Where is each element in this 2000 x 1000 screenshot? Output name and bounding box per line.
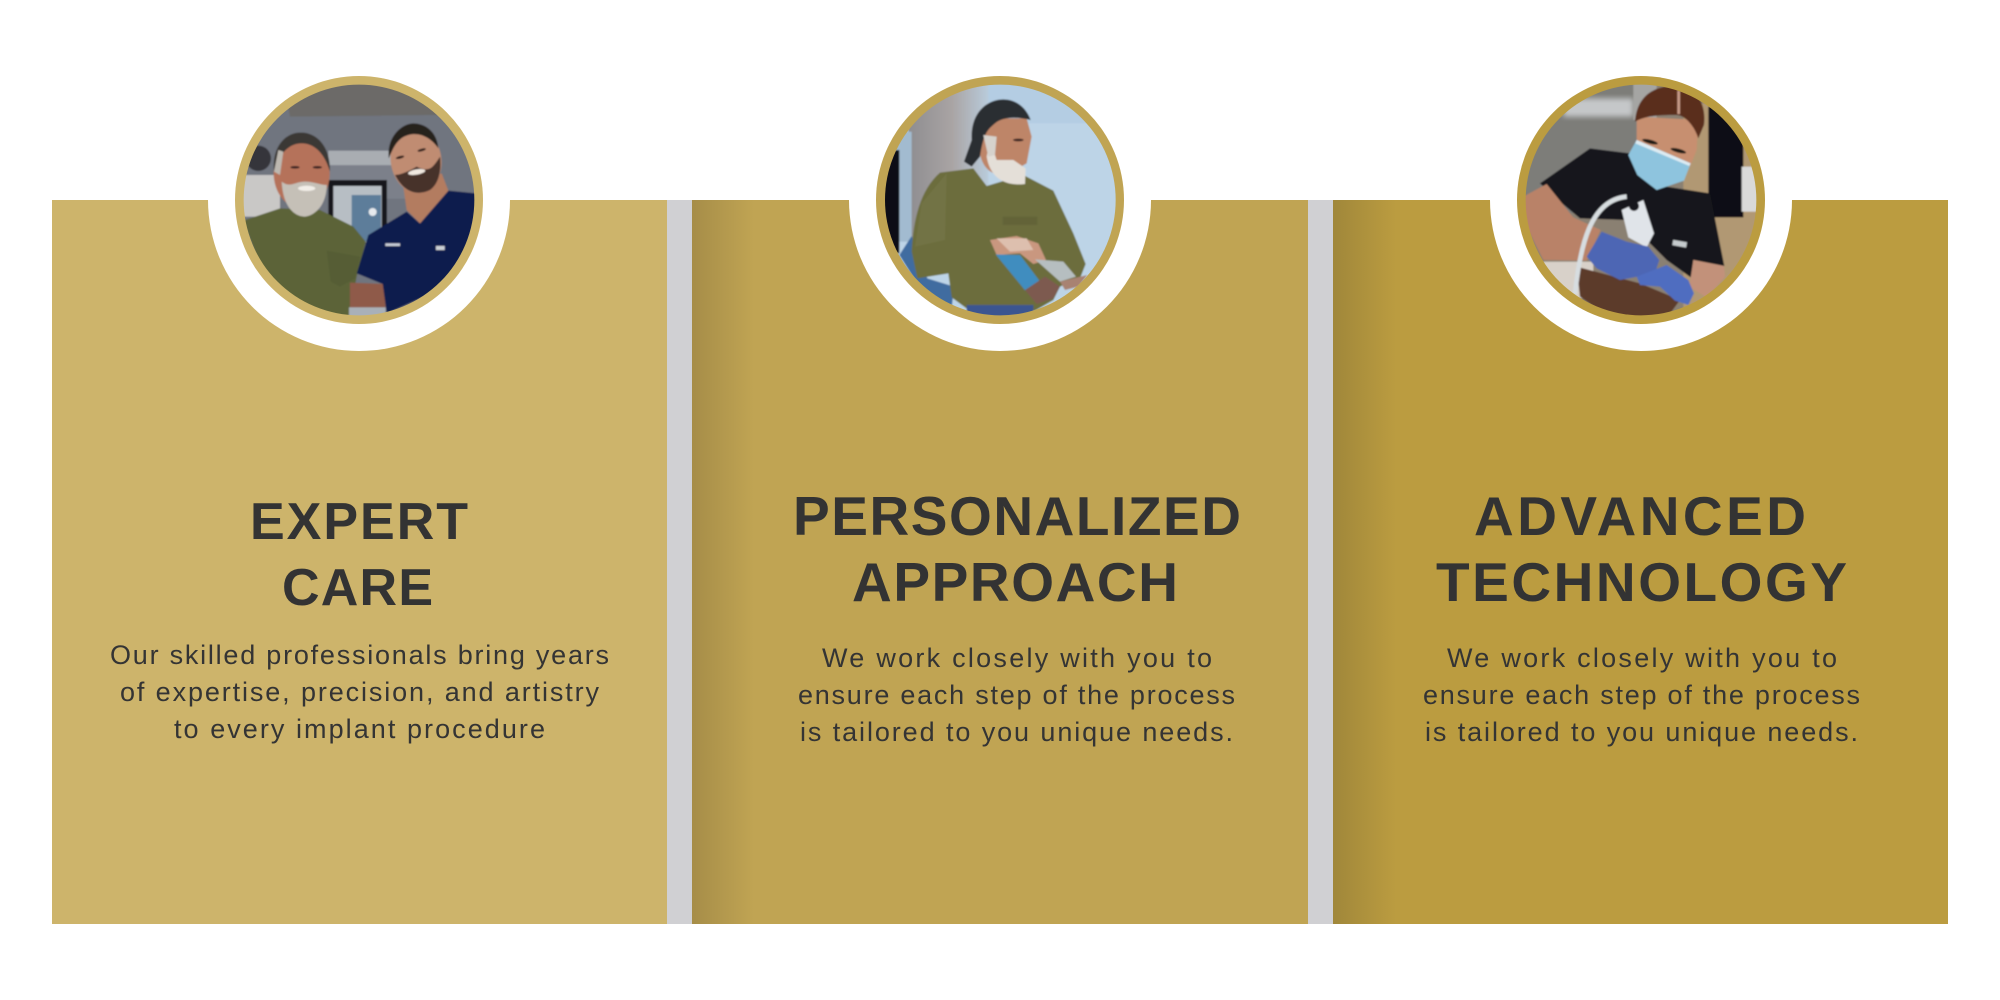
photo: patient reviewing tablet xyxy=(876,76,1124,324)
heading: personalized approach xyxy=(793,485,1241,613)
body text: advanced technology xyxy=(1423,643,1860,747)
heading: advanced technology: TECHNOLOGY xyxy=(1436,551,1847,613)
heading: personalized approach: PERSONALIZED xyxy=(793,485,1241,547)
body text: expert care: to every implant procedure xyxy=(174,714,545,744)
body text: advanced technology: We work closely with you to xyxy=(1447,643,1837,673)
heading: expert care xyxy=(250,493,468,617)
panel: expert care xyxy=(52,40,667,924)
separator strips xyxy=(667,200,1333,924)
photo: patient and dentist smiling xyxy=(235,76,483,324)
photo: technician using laser device xyxy=(1517,76,1765,324)
body text: personalized approach: We work closely with you to xyxy=(822,643,1212,673)
panel: personalized approach xyxy=(692,40,1308,924)
body text: expert care: of expertise, precision, and artistry xyxy=(120,677,600,707)
body text: advanced technology: ensure each step of the process xyxy=(1423,680,1860,710)
body text: personalized approach xyxy=(798,643,1235,747)
body text: personalized approach: ensure each step of the process xyxy=(798,680,1235,710)
heading: personalized approach: APPROACH xyxy=(852,551,1178,613)
panel: advanced technology xyxy=(1333,40,1948,924)
body text: advanced technology: is tailored to you unique needs. xyxy=(1425,717,1858,747)
heading: expert care: CARE xyxy=(282,559,433,617)
heading: advanced technology xyxy=(1436,485,1847,613)
body text: expert care: Our skilled professionals bring years xyxy=(110,640,609,670)
heading: advanced technology: ADVANCED xyxy=(1474,485,1806,547)
body text: expert care xyxy=(110,640,609,744)
heading: expert care: EXPERT xyxy=(250,493,468,551)
body text: personalized approach: is tailored to you unique needs. xyxy=(800,717,1233,747)
